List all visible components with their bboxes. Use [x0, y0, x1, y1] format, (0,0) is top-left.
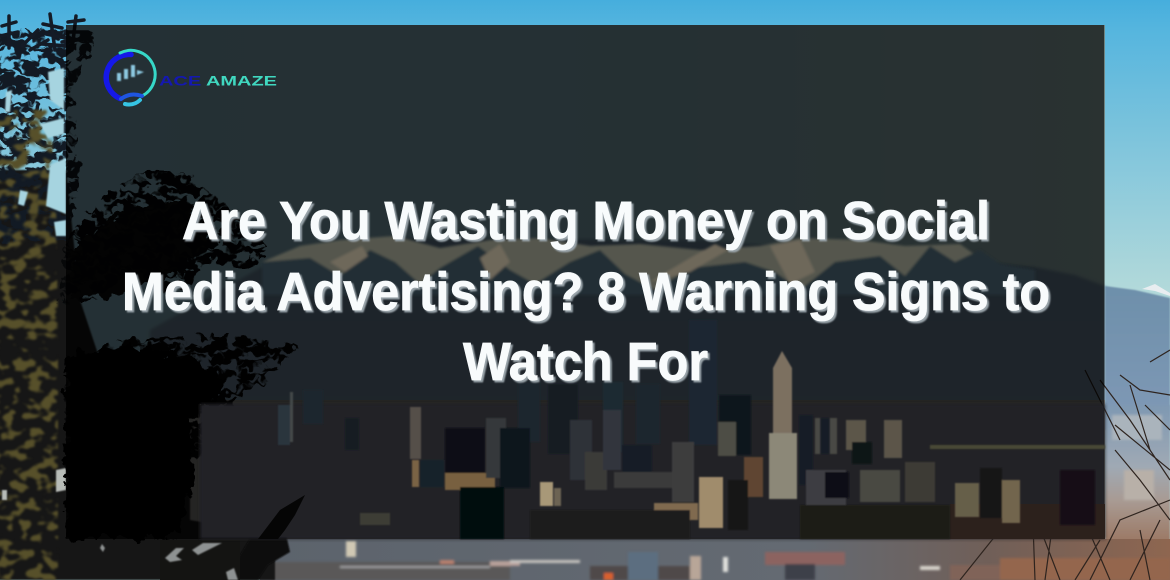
tan peaks [262, 236, 985, 290]
title shadow [124, 193, 1052, 394]
city in panel [200, 320, 1105, 539]
title text: Are You Wasting Money on Social [182, 191, 990, 251]
dark ridges [262, 246, 1035, 295]
dark hills behind city [150, 238, 1105, 420]
olive needles [0, 110, 58, 580]
snow cap [1142, 284, 1170, 296]
distant mountains on right [1105, 286, 1170, 430]
sky gaps in the tree [2, 68, 66, 500]
title shadow: Are You Wasting Money on Social [184, 193, 992, 253]
area behind the panel [66, 25, 1105, 539]
logo wordmark: ACE AMAZE [159, 72, 277, 88]
logo bars [117, 65, 144, 81]
lower trunk mass [0, 170, 275, 580]
title shadow: Watch For [465, 334, 710, 394]
tree top tips [0, 14, 92, 50]
lower district details [270, 415, 1170, 580]
city ground [150, 400, 1105, 540]
logo ring icon [106, 50, 155, 104]
bare branches on the right [960, 350, 1170, 580]
lit patches under branch [100, 543, 238, 580]
upper branch core [66, 200, 215, 300]
middle branch [66, 335, 297, 520]
dark low foliage in band [160, 540, 240, 580]
dark translucent panel [66, 25, 1104, 539]
small low branch [230, 495, 305, 580]
title [122, 191, 1052, 394]
title shadow: Media Advertising? 8 Warning Signs to [124, 264, 1052, 324]
right edge strip [1105, 405, 1170, 580]
mountain range in panel [262, 236, 1035, 295]
title text: Media Advertising? 8 Warning Signs to [122, 262, 1050, 322]
foreground evergreen tree [0, 14, 305, 580]
lower district band [260, 539, 1170, 580]
bright rock faces [330, 240, 815, 284]
low branch tip over panel city [258, 495, 305, 539]
title text [122, 191, 1050, 392]
middle branch core [66, 345, 225, 539]
upper branch [60, 170, 270, 300]
dark city base [200, 404, 1105, 539]
title text: Watch For [463, 332, 708, 392]
lacy upper tree [0, 30, 95, 240]
skyline towers [278, 320, 1105, 539]
logo: Ace Amaze [106, 50, 277, 104]
